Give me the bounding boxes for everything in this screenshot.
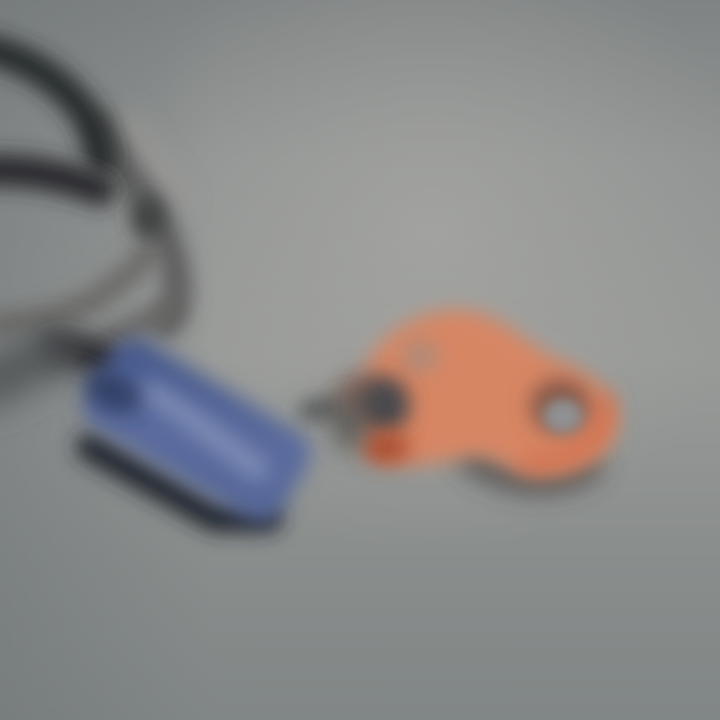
pale sheen beside the cable (125, 120, 178, 200)
fob stud (401, 339, 439, 373)
tag body (74, 329, 320, 531)
fob rim tint (525, 400, 606, 463)
cable loops (0, 50, 178, 385)
connector wire (300, 406, 345, 412)
metal connector (332, 375, 410, 464)
grey outer strand (100, 125, 177, 325)
knot on the cable (132, 196, 164, 240)
tag shadow (90, 447, 268, 518)
orange key fob (332, 310, 616, 480)
grey inner strand (0, 252, 150, 325)
fob body (360, 310, 616, 476)
black upper arc (0, 50, 102, 160)
dark base of the cable (55, 348, 130, 375)
fob hole (530, 379, 590, 433)
tag highlight (150, 392, 258, 470)
dark corner (77, 363, 147, 421)
blue tag (74, 329, 320, 531)
fob shadow (470, 458, 590, 480)
lower strand (100, 310, 172, 345)
black horizontal strand (0, 170, 100, 190)
